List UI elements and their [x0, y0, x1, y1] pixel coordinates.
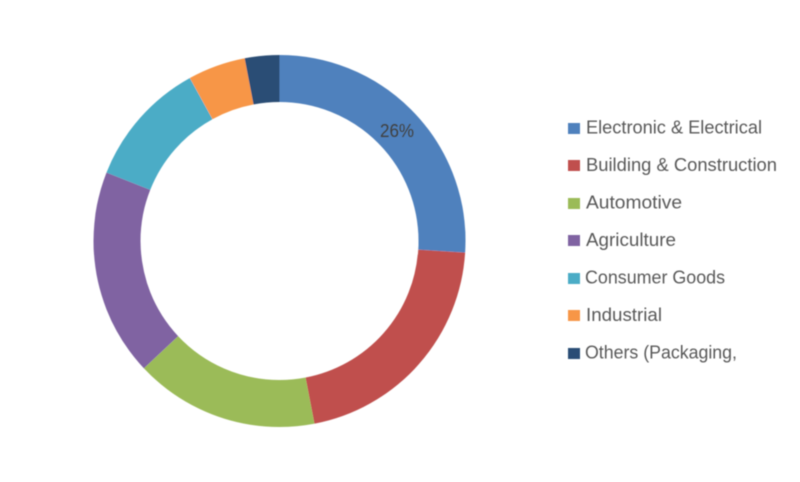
legend item: Consumer Goods: Consumer Goods	[585, 266, 725, 288]
segment: Agriculture	[117, 78, 442, 404]
segment: Others	[117, 78, 442, 404]
data label: 26%: 26%	[380, 121, 414, 141]
legend item: Building & Construction: Building & Construction	[586, 154, 777, 175]
legend item: Industrial: Industrial	[586, 304, 662, 325]
doughnut chart	[117, 78, 442, 404]
legend item: Agriculture: Agriculture	[586, 229, 676, 250]
legend item: Electronic & Electrical: Electronic & Electrical	[586, 116, 762, 138]
legend item: Automotive: Automotive	[586, 192, 682, 212]
segment: Automotive	[117, 78, 442, 404]
segment: Building & Construction	[117, 78, 442, 404]
legend item: Others (Packaging,: Others (Packaging,	[585, 342, 737, 362]
segment: Electronic & Electrical 26%	[117, 78, 442, 404]
segment: Industrial	[117, 78, 442, 404]
segment: Consumer Goods	[117, 78, 442, 404]
legend	[568, 116, 777, 362]
